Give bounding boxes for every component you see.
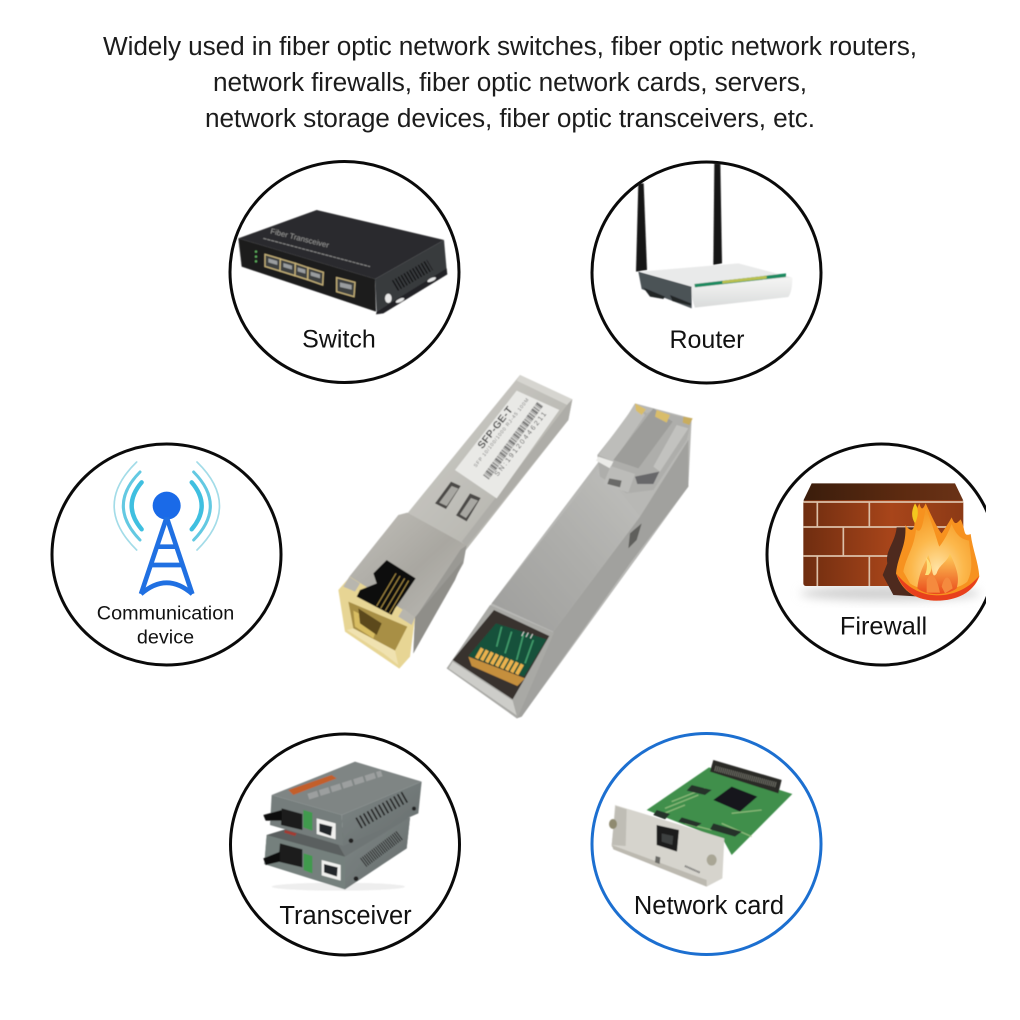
icon: stacked media converters bbox=[263, 762, 422, 891]
right SFP module bbox=[447, 403, 693, 718]
label: Communication device: device bbox=[137, 626, 194, 648]
icon: brick wall with flame bbox=[800, 483, 980, 601]
RJ45 opening bbox=[357, 560, 416, 615]
label: Communication device bbox=[97, 602, 234, 648]
center product photo: two SFP modules bbox=[338, 375, 693, 718]
heading: usage description: Widely used in fiber optic network switches, fiber optic network routers, bbox=[103, 31, 917, 61]
panel: switch bbox=[230, 162, 459, 382]
product label bbox=[455, 391, 559, 498]
left SFP module bbox=[338, 375, 572, 669]
panel: communication device bbox=[52, 444, 281, 665]
panel: firewall bbox=[767, 444, 996, 665]
label: Firewall: Firewall bbox=[840, 612, 927, 640]
icon: black network switch: Fiber Transceiver bbox=[270, 227, 330, 250]
heading: usage description bbox=[103, 31, 917, 133]
label: Router: Router bbox=[669, 326, 745, 354]
panel: network card bbox=[592, 734, 821, 954]
icon: signal tower bbox=[114, 462, 219, 594]
panel: transceiver bbox=[230, 734, 460, 955]
heading: usage description: network firewalls, fiber optic network cards, servers, bbox=[213, 67, 807, 97]
heading: usage description: network storage devices, fiber optic transceivers, etc. bbox=[205, 103, 815, 133]
panel: router bbox=[592, 162, 821, 383]
SFP front port with circuit board bbox=[447, 605, 554, 718]
icon: black network switch bbox=[238, 210, 447, 314]
product label: SN:19120446211 bbox=[494, 411, 548, 478]
product label: SFP 10/100/1000 RJ-45 100M bbox=[473, 397, 531, 469]
label: Switch: Switch bbox=[302, 326, 376, 354]
label: Network card: Network card bbox=[634, 892, 784, 920]
label: Transceiver: Transceiver bbox=[279, 902, 412, 930]
label: Communication device: Communication bbox=[97, 602, 234, 624]
icon: wireless router bbox=[636, 163, 792, 308]
product label: SFP-GE-T bbox=[476, 404, 516, 451]
icon: network interface card bbox=[609, 760, 792, 887]
flame bbox=[896, 503, 979, 601]
